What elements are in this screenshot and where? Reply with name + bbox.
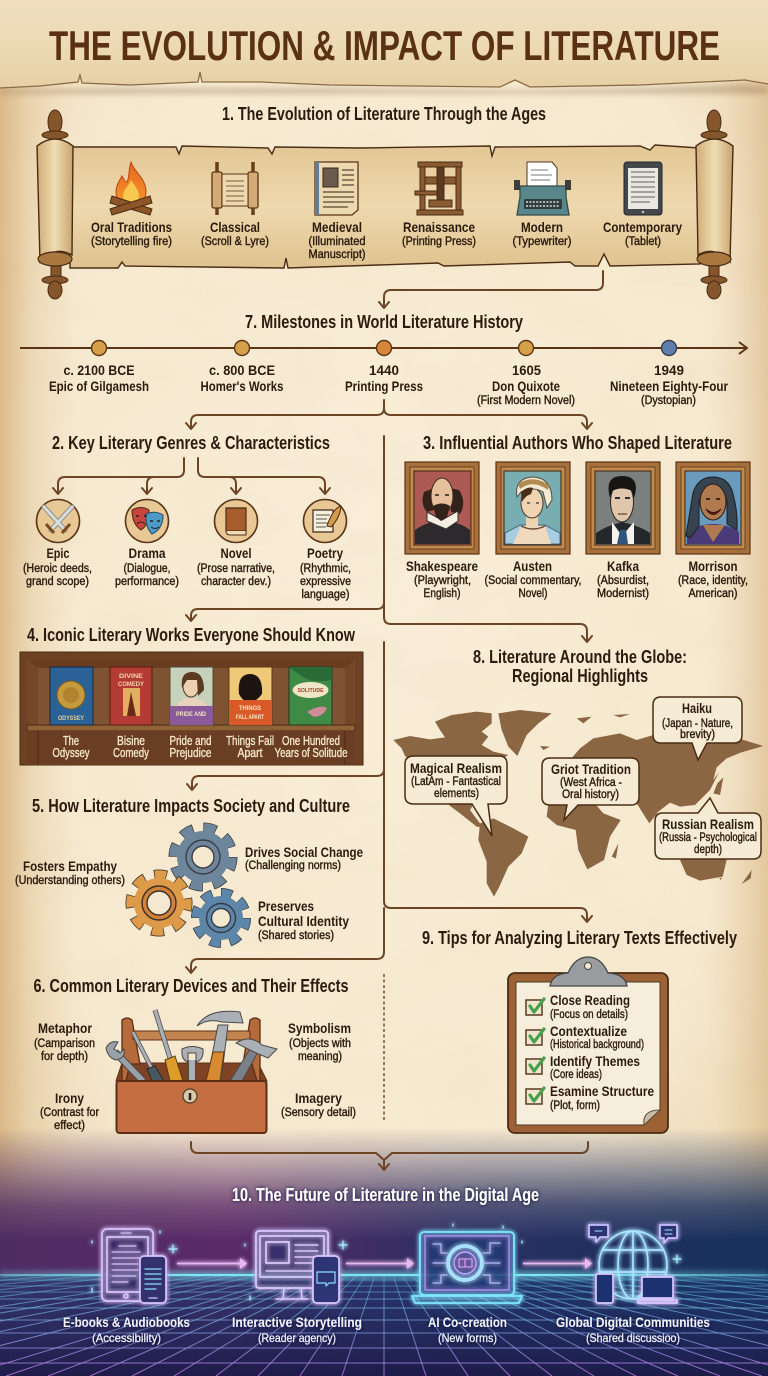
icon: illuminated manuscript bbox=[315, 162, 358, 215]
arrow bbox=[346, 1258, 414, 1269]
labels: devices: for depth) bbox=[41, 1051, 88, 1063]
icon: interactive storytelling bbox=[245, 1231, 347, 1303]
labels: ages: (Illuminated bbox=[308, 236, 366, 248]
labels: ages: Renaissance bbox=[403, 219, 475, 235]
tips: (Plot, form) bbox=[550, 1100, 600, 1112]
panel: genres bbox=[23, 500, 351, 601]
labels: genres: expressive bbox=[300, 576, 351, 588]
book: Divine Comedy bbox=[110, 667, 152, 725]
icon: tablet bbox=[624, 162, 662, 215]
callout: Haiku bbox=[653, 697, 742, 760]
labels: digital: Interactive Storytelling bbox=[232, 1314, 362, 1330]
labels: digital: (Accessibility) bbox=[92, 1331, 161, 1345]
world map bbox=[393, 710, 763, 897]
timeline: c. 2100 BCE bbox=[64, 362, 134, 378]
labels: devices: Symbolism bbox=[288, 1020, 351, 1036]
callout: Russian Realism: depth) bbox=[694, 844, 722, 856]
labels: authors: Kafka bbox=[607, 558, 639, 574]
tools bbox=[106, 1010, 277, 1081]
labels: devices: effect) bbox=[54, 1120, 85, 1132]
tips: Contextualize bbox=[550, 1023, 627, 1039]
labels: ages: (Typewriter) bbox=[512, 236, 572, 248]
book: Pride and Prejudice bbox=[170, 667, 213, 725]
title banner bbox=[0, 0, 768, 94]
icon: epic swords bbox=[36, 500, 80, 542]
labels: genres: character dev.) bbox=[201, 576, 271, 588]
labels: authors: Shakespeare bbox=[406, 558, 478, 574]
labels: books: Comedy bbox=[113, 746, 150, 760]
labels: digital: (Shared discussioo) bbox=[586, 1331, 680, 1345]
tips: (Historical background) bbox=[550, 1039, 644, 1051]
labels: ages: Contemporary bbox=[603, 219, 682, 235]
labels: authors bbox=[406, 558, 748, 600]
timeline: Nineteen Eighty-Four bbox=[610, 378, 728, 394]
tips: Close Reading bbox=[550, 992, 630, 1008]
icon: poetry quill bbox=[304, 500, 346, 542]
panel: authors bbox=[405, 462, 750, 600]
labels: genres: Poetry bbox=[307, 545, 343, 561]
callout: Magical Realism: Magical Realism bbox=[410, 760, 502, 776]
arrow: to future section bbox=[191, 1142, 588, 1170]
labels: society impact: Fosters Empathy bbox=[23, 858, 117, 874]
labels: genres: Novel bbox=[220, 545, 252, 561]
book: Things Fail Apart: FALL APART bbox=[236, 715, 264, 721]
labels: society impact: (Challenging norms) bbox=[245, 860, 341, 872]
timeline: Printing Press bbox=[345, 378, 423, 394]
arrow bbox=[177, 1258, 247, 1269]
labels: books: Bisine bbox=[117, 734, 145, 748]
labels: ages: Medieval bbox=[312, 219, 362, 235]
icon: scroll and lyre bbox=[212, 162, 258, 215]
labels: books: Odyssey bbox=[52, 746, 90, 760]
central connector top bbox=[186, 436, 592, 642]
labels: books: Pride and bbox=[170, 734, 212, 748]
checkboxes bbox=[526, 999, 544, 1104]
labels: genres bbox=[23, 545, 351, 601]
central connector lower bbox=[186, 642, 592, 973]
labels: books: The bbox=[63, 734, 79, 748]
timeline: 1605 bbox=[512, 362, 541, 378]
icon: AI co-creation bbox=[412, 1224, 522, 1303]
labels: digital: AI Co-creation bbox=[428, 1314, 507, 1330]
book: One Hundred Years of Solitude bbox=[289, 667, 332, 725]
heading 10: 10. The Future of Literature in the Digital Age bbox=[232, 1185, 539, 1205]
labels: genres: Epic bbox=[46, 545, 70, 561]
labels: ages: Classical bbox=[210, 219, 260, 235]
tips bbox=[550, 992, 654, 1112]
labels: authors: (Absurdist, bbox=[597, 575, 649, 587]
labels: authors: Modernist) bbox=[597, 588, 649, 600]
icon: typewriter bbox=[514, 162, 571, 215]
timeline: c. 800 BCE bbox=[209, 362, 275, 378]
heading 4: 4. Iconic Literary Works Everyone Should Know bbox=[27, 625, 356, 645]
labels: genres: (Dialogue, bbox=[124, 563, 170, 575]
book: The Odyssey: ODYSSEY bbox=[58, 716, 84, 722]
labels: authors: (Playwright, bbox=[414, 575, 471, 587]
callout: Magical Realism bbox=[405, 756, 507, 836]
book: Pride and Prejudice: PRIDE AND bbox=[176, 712, 207, 718]
labels: digital bbox=[63, 1314, 710, 1345]
labels: society impact: Preserves bbox=[258, 898, 314, 914]
labels: books: One Hundred bbox=[282, 734, 340, 748]
panel: bookshelf bbox=[20, 652, 363, 765]
heading 5: 5. How Literature Impacts Society and Culture bbox=[32, 796, 350, 816]
portrait: Austen bbox=[496, 462, 570, 554]
callout: Griot Tradition bbox=[542, 758, 639, 820]
labels: genres: performance) bbox=[115, 576, 179, 588]
tips: (Core ideas) bbox=[550, 1069, 602, 1081]
labels: genres: (Heroic deeds, bbox=[23, 563, 92, 575]
labels: authors: Morrison bbox=[688, 558, 738, 574]
callout: Griot Tradition: Griot Tradition bbox=[551, 761, 631, 777]
labels: genres: Drama bbox=[128, 545, 166, 561]
callout: Griot Tradition: Oral history) bbox=[562, 789, 619, 801]
callout: Haiku: Haiku bbox=[682, 700, 712, 716]
arrow bbox=[523, 1258, 592, 1269]
labels: authors: Novel) bbox=[518, 588, 548, 600]
labels: ages: Manuscript) bbox=[308, 249, 366, 261]
portrait: Kafka bbox=[586, 462, 660, 554]
labels: books: Years of Solitude bbox=[274, 746, 348, 760]
arrow: milestones branch bbox=[186, 400, 592, 429]
portrait: Morrison bbox=[676, 462, 750, 554]
book: Things Fail Apart: THINGS bbox=[239, 706, 261, 712]
icon: drama masks bbox=[126, 500, 168, 542]
labels: devices: (Camparison bbox=[34, 1038, 95, 1050]
callout: Haiku: brevity) bbox=[680, 729, 715, 741]
icon: novel book bbox=[214, 500, 258, 542]
labels: society impact: Drives Social Change bbox=[245, 844, 363, 860]
labels: society impact bbox=[15, 844, 363, 942]
icon: e-books and audiobooks bbox=[92, 1229, 177, 1303]
book: Things Fail Apart bbox=[229, 667, 272, 725]
labels: society impact: (Shared stories) bbox=[258, 930, 334, 942]
labels: devices: (Objects with bbox=[289, 1038, 351, 1050]
tips: Esamine Structure bbox=[550, 1083, 654, 1099]
labels: authors: English) bbox=[424, 588, 461, 600]
heading 1: 1. The Evolution of Literature Through the Ages bbox=[222, 104, 546, 124]
labels: authors: (Social commentary, bbox=[484, 575, 582, 587]
icon: storytelling fire bbox=[110, 162, 152, 215]
callout: Magical Realism: (LatAm - Fantastical bbox=[411, 776, 501, 788]
timeline: (Dystopian) bbox=[641, 395, 696, 407]
labels: society impact: (Understanding others) bbox=[15, 875, 125, 887]
labels: ages: Modern bbox=[521, 219, 563, 235]
icon: printing press bbox=[415, 162, 463, 215]
heading 8: Regional Highlights bbox=[512, 666, 648, 686]
panel: digital age background bbox=[0, 1128, 768, 1376]
labels: ages: (Printing Press) bbox=[402, 236, 476, 248]
toolbox bbox=[106, 1010, 277, 1133]
left roller bbox=[37, 110, 73, 299]
genre branch arrows bbox=[53, 458, 330, 494]
labels: genres: language) bbox=[302, 589, 350, 601]
labels: authors: (Race, identity, bbox=[678, 575, 748, 587]
labels: genres: (Prose narrative, bbox=[197, 563, 275, 575]
callout: Magical Realism: elements) bbox=[434, 788, 479, 800]
labels: books: Apart bbox=[238, 746, 263, 760]
labels: digital: Global Digital Communities bbox=[556, 1314, 710, 1330]
labels: devices: Irony bbox=[55, 1090, 84, 1106]
labels: devices: (Contrast for bbox=[40, 1107, 99, 1119]
timeline: (First Modern Novel) bbox=[477, 395, 575, 407]
labels: society impact: Cultural Identity bbox=[258, 913, 349, 929]
timeline bbox=[20, 340, 747, 407]
labels: digital: (Reader agency) bbox=[258, 1331, 336, 1345]
labels: devices: Imagery bbox=[295, 1090, 342, 1106]
labels: authors: Austen bbox=[513, 558, 552, 574]
labels: devices bbox=[34, 1020, 356, 1132]
timeline: 1949 bbox=[654, 362, 684, 378]
labels: books bbox=[52, 734, 348, 760]
labels: authors: American) bbox=[688, 588, 738, 600]
heading 7: 7. Milestones in World Literature History bbox=[245, 312, 523, 332]
book: The Odyssey bbox=[50, 667, 93, 725]
book: Divine Comedy: COMEDY bbox=[118, 682, 144, 688]
icon: global digital communities bbox=[589, 1225, 681, 1303]
labels: books: Things Fail bbox=[226, 734, 274, 748]
tips: (Focus on details) bbox=[550, 1009, 628, 1021]
labels: ages: (Scroll & Lyre) bbox=[201, 236, 269, 248]
timeline: Epic of Gilgamesh bbox=[49, 378, 149, 394]
gears bbox=[131, 828, 246, 943]
labels: books: Prejudice bbox=[170, 746, 212, 760]
callout: Griot Tradition: (West Africa - bbox=[560, 777, 622, 789]
labels: ages: Oral Traditions bbox=[91, 219, 172, 235]
labels: devices: (Sensory detail) bbox=[281, 1107, 356, 1119]
gear: blue small bbox=[196, 893, 246, 943]
arrow: scroll to milestones bbox=[379, 271, 603, 308]
labels: ages: (Tablet) bbox=[625, 236, 661, 248]
labels: digital: (New forms) bbox=[438, 1331, 497, 1345]
right roller bbox=[696, 110, 733, 299]
book: One Hundred Years of Solitude: SOLITUDE bbox=[298, 688, 324, 694]
labels: genres: grand scope) bbox=[26, 576, 89, 588]
timeline: Homer's Works bbox=[200, 378, 284, 394]
heading 2: 2. Key Literary Genres & Characteristics bbox=[52, 433, 330, 453]
callout: Russian Realism bbox=[655, 798, 761, 859]
gear: orange bbox=[131, 875, 187, 931]
labels: devices: Metaphor bbox=[38, 1020, 92, 1036]
labels: genres: (Rhythmic, bbox=[300, 563, 351, 575]
labels: ages: (Storytelling fire) bbox=[91, 236, 172, 248]
callout: Haiku: (Japan - Nature, bbox=[662, 718, 733, 730]
heading 6: 6. Common Literary Devices and Their Effects bbox=[34, 976, 348, 996]
timeline: 1440 bbox=[369, 362, 399, 378]
portrait: Shakespeare bbox=[405, 462, 479, 554]
labels: digital: E-books & Audiobooks bbox=[63, 1314, 190, 1330]
clipboard bbox=[508, 957, 668, 1133]
tips: Identify Themes bbox=[550, 1053, 640, 1069]
timeline: Don Quixote bbox=[492, 378, 560, 394]
heading 8: 8. Literature Around the Globe: bbox=[473, 647, 687, 667]
scroll panel: ages bbox=[37, 110, 733, 299]
gear: blue top bbox=[174, 828, 232, 886]
heading 8 bbox=[473, 647, 687, 686]
labels: devices: meaning) bbox=[298, 1051, 342, 1063]
labels: ages bbox=[91, 219, 682, 261]
book: Divine Comedy: DIVINE bbox=[119, 674, 143, 680]
